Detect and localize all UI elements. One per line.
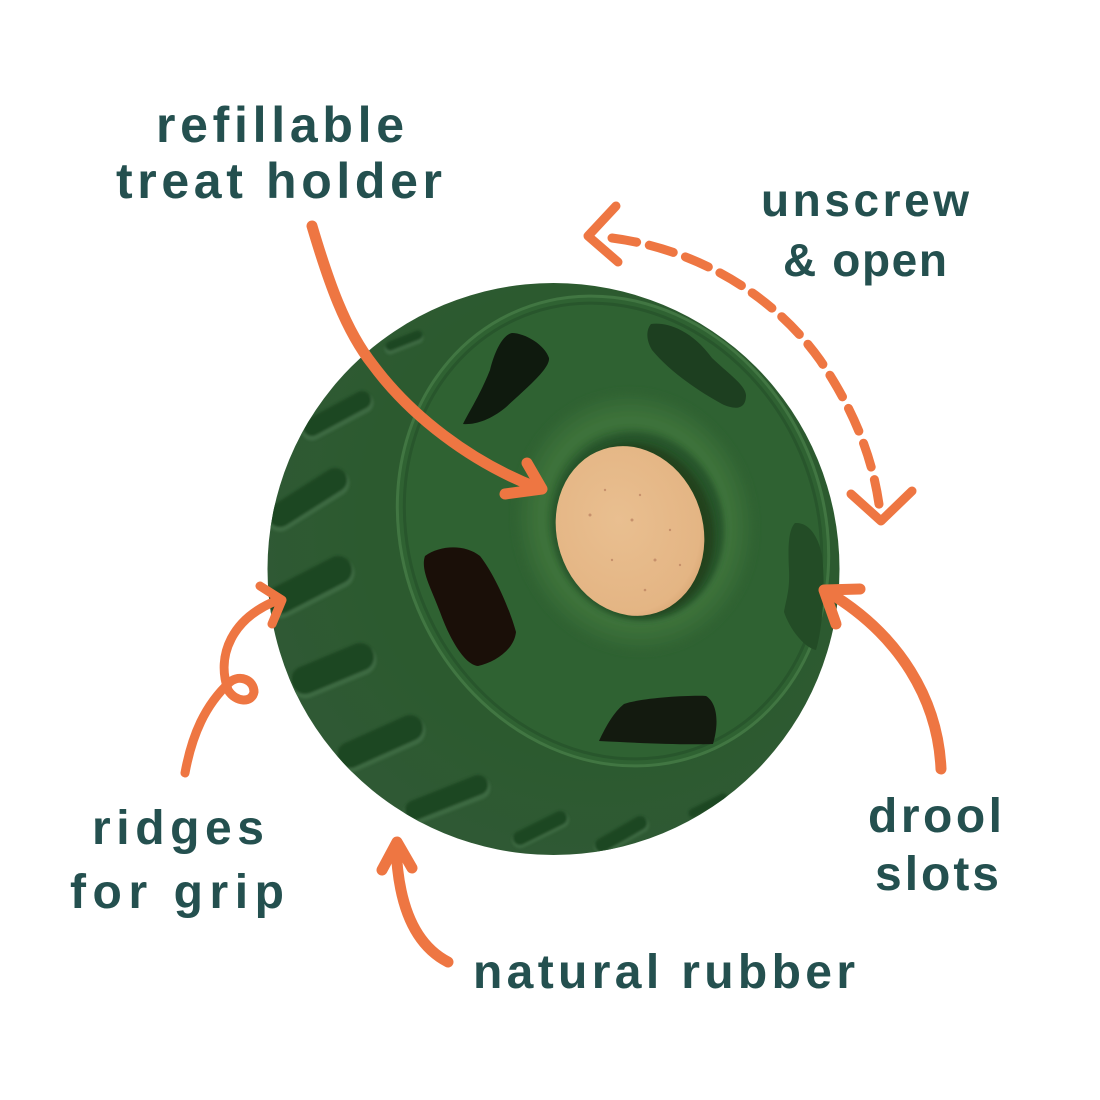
arrow: natural rubber — [382, 842, 448, 962]
label: drool slots: drool — [868, 790, 1002, 843]
label: refillable treat holder: refillable — [156, 97, 404, 153]
treat speckles — [588, 489, 681, 591]
treat hole — [532, 414, 744, 640]
label: unscrew and open — [761, 174, 969, 286]
label: ridges for grip: for grip — [70, 866, 284, 919]
label: unscrew and open: unscrew — [761, 174, 969, 226]
label: ridges for grip — [70, 802, 284, 919]
slot: upper right — [647, 324, 746, 408]
treat ball — [534, 427, 726, 635]
grip ridges — [280, 335, 723, 847]
slot: lower left — [424, 547, 516, 666]
product: rubber ball — [268, 283, 840, 855]
arrow: ridges for grip — [185, 586, 282, 773]
arrow: drool slots — [824, 589, 941, 769]
label: natural rubber: natural rubber — [473, 946, 855, 999]
label: unscrew and open: & open — [783, 234, 947, 286]
slot: bottom — [599, 696, 717, 744]
label: drool slots — [868, 790, 1002, 901]
infographic — [70, 106, 999, 988]
inner groove — [331, 234, 895, 828]
arrow: unscrew and open — [588, 206, 912, 521]
slot: right drool slot — [784, 523, 824, 650]
ball body — [268, 283, 840, 855]
slots — [424, 324, 824, 744]
slot: upper left — [463, 333, 549, 424]
label: refillable treat holder — [116, 97, 442, 209]
arrow: refillable treat holder — [312, 226, 542, 494]
front face rim — [321, 225, 905, 837]
label: ridges for grip: ridges — [92, 802, 264, 855]
label: refillable treat holder: treat holder — [116, 153, 442, 209]
label: drool slots: slots — [875, 848, 999, 901]
treat shadow — [540, 423, 736, 635]
treat holder ring — [485, 363, 785, 681]
